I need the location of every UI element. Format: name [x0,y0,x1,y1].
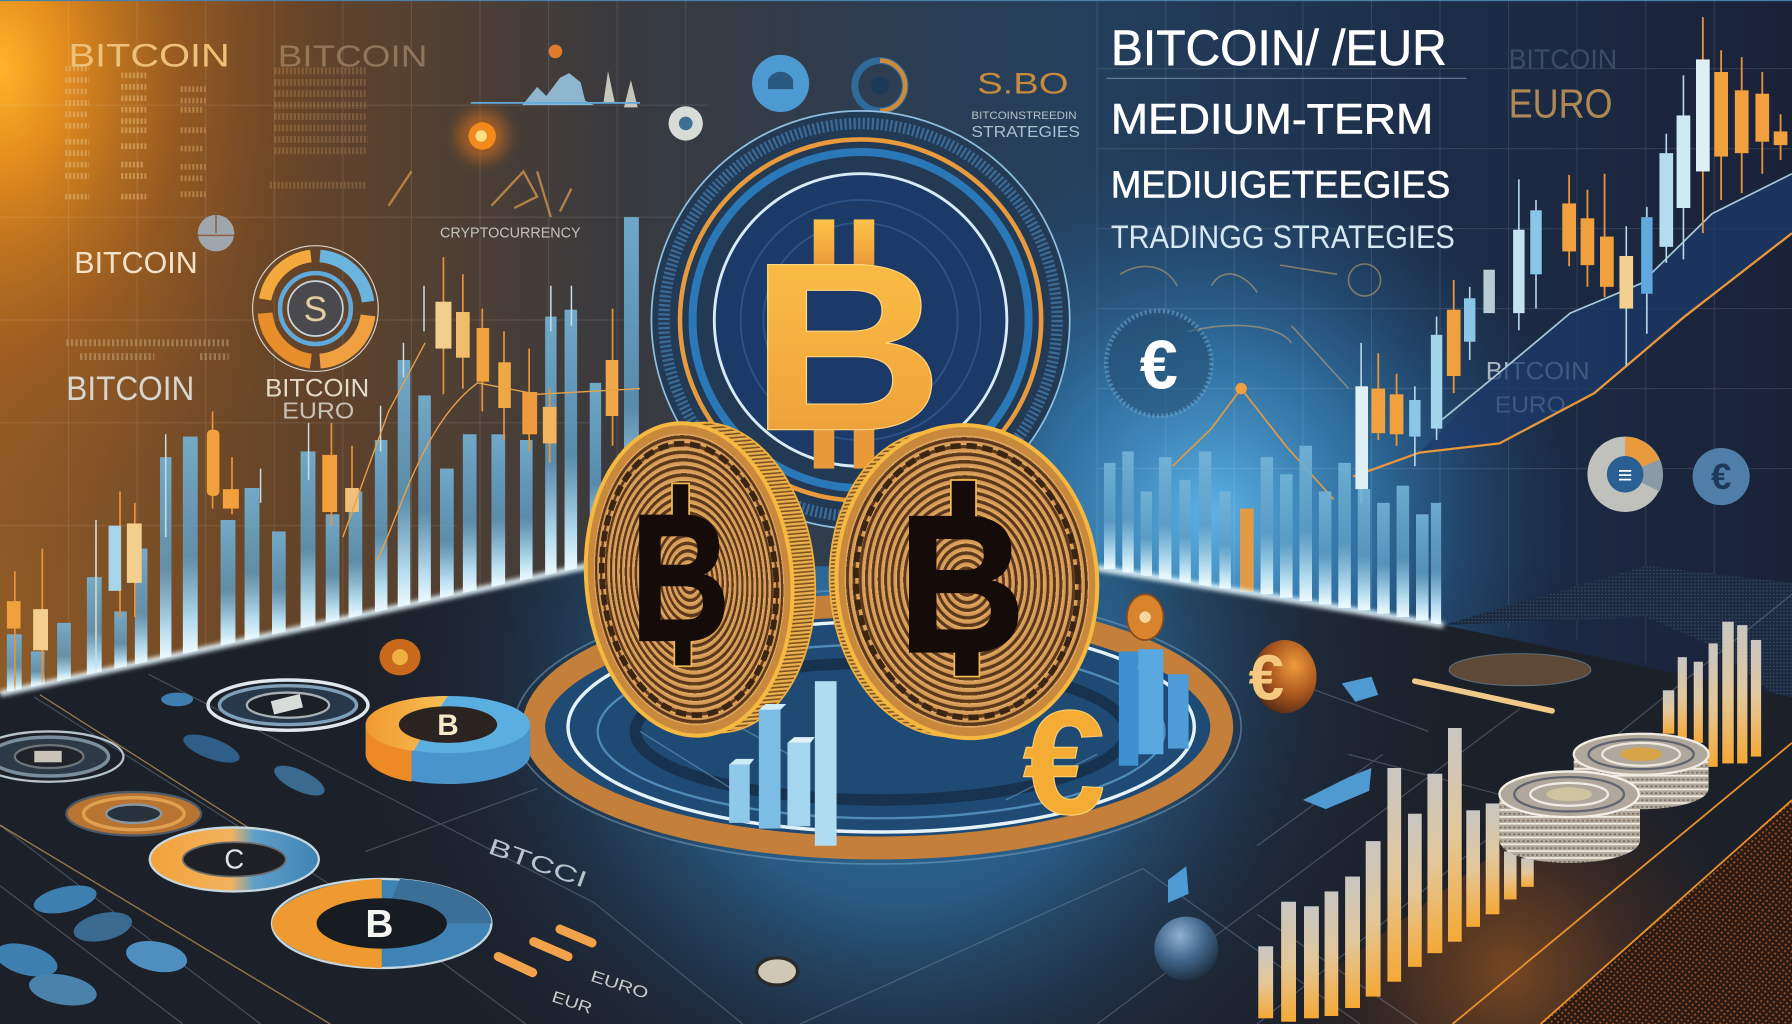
icon: gray knob [198,215,234,251]
left top data table [65,69,368,197]
mini area chart [471,71,640,107]
orange floor dashes [498,929,592,973]
blue floor tiles [0,693,329,1010]
lower right bars chart [1258,728,1534,1022]
bitcoin disc gauge: B [365,903,393,946]
icon: ring dollar gauge: S [304,289,327,329]
label: BITCOIN EURO: BITCOIN [265,375,369,403]
label: BITCOIN lower left: BITCOIN [66,370,194,408]
floor pill [1415,681,1552,711]
swirl disc orange [66,792,201,835]
big circle emblem [651,111,1070,529]
icon: orange blue ring [855,61,905,111]
right candlestick chart [1355,17,1787,503]
label: EURO top right: EURO [1509,81,1613,127]
area: mesh band [1353,174,1792,477]
label: BITCOIN left: BITCOIN [74,245,198,280]
flat disc gauge: C [224,844,244,875]
floor labels: EUR: EUR [550,989,594,1018]
label: EURO top right: BITCOIN [1509,44,1617,75]
heading: faded BITCOIN labels: BITCOIN [69,37,230,73]
label: BITCOIN EURO [265,375,369,423]
label: BITCOIN EURO right [1486,357,1590,418]
money stack front [1499,771,1640,863]
right pie chart [1587,437,1663,512]
floor orange lens [1449,654,1591,686]
right gold coin [819,416,1108,747]
right gold coin: B [898,476,1025,693]
heading: faded BITCOIN labels [69,37,427,73]
floor label: BTCC: BTCCI [485,833,591,892]
floor labels: EUR [550,968,650,1018]
orange small coin [1127,594,1163,640]
bottom right copper panel [1453,743,1792,1024]
3D pie chart [366,696,530,784]
icon: ring dollar gauge [253,246,378,371]
icon: euro ring [1106,311,1211,416]
right mesh panel [1443,566,1792,709]
blue floor shards [1168,677,1378,903]
big gold bitcoin symbol: B [750,212,944,481]
right euro icon [1693,448,1750,505]
label: BITCOIN EURO right: EURO [1495,392,1566,418]
main title [1106,19,1466,255]
label: BITCOIN EURO: EURO [282,397,354,423]
swirl disc left [0,731,123,782]
right pie chart: ≡ [1618,461,1632,489]
icon: euro ring: € [1140,327,1178,404]
floor labels: EUR: EURO [588,968,650,1003]
left gold coin [573,412,828,744]
small label: S.BO strategies: STRATEGIES [971,124,1080,141]
peak marker [1235,383,1247,394]
left bars on horizon [7,217,639,691]
icon: orange small marker [549,45,562,58]
right bars on horizon [1104,446,1441,624]
scribble marks [389,171,571,217]
label: BITCOIN EURO right: BITCOIN [1486,357,1590,385]
line: pale trend [1442,174,1792,419]
small bottom orb [757,958,798,985]
left candlestick chart [7,257,618,714]
gold euro sign: € [1023,681,1105,846]
small label: S.BO strategies: BITCOINSTREEDIN [971,110,1077,122]
small label: S.BO strategies [971,68,1080,141]
upper right amber bars [1663,622,1761,767]
faint notes under bitcoin label [66,343,229,357]
bitcoin disc gauge [272,879,491,968]
main title: TRADINGG STRATEGIES [1111,219,1455,255]
money stack back [1574,734,1709,809]
center 3D blue bars [729,649,1189,846]
left gold coin: B [631,477,730,678]
label: CRYPTOCURRENCY: CRYPTOCURRENCY [440,226,581,242]
icon: orange glow point [457,111,507,161]
icon: pale button [669,106,703,141]
line: orange trend [1353,233,1792,477]
right euro icon: € [1711,456,1731,497]
small label: S.BO strategies: S.BO [977,68,1069,101]
platform rings [514,590,1241,864]
blue sphere [1154,917,1218,981]
label: EURO top right [1509,44,1617,127]
heading: faded BITCOIN labels: BITCOIN [278,38,427,73]
floor [0,565,1792,1024]
swirl disc top [208,680,368,730]
left floor orb [379,639,421,675]
line chart: peak line [1173,389,1334,499]
main title: MEDIUM-TERM [1111,96,1433,143]
scribble sketch under title [1120,264,1381,389]
icon: blue dial [752,55,809,112]
euro orb: € [1248,641,1284,713]
main title: MEDIUIGETEEGIES [1111,164,1450,206]
3D pie chart: B [437,709,459,742]
euro orb [1248,640,1317,713]
flat disc gauge [150,827,319,891]
main title: BITCOIN/ /EUR [1111,19,1447,76]
left curved line [343,343,640,560]
